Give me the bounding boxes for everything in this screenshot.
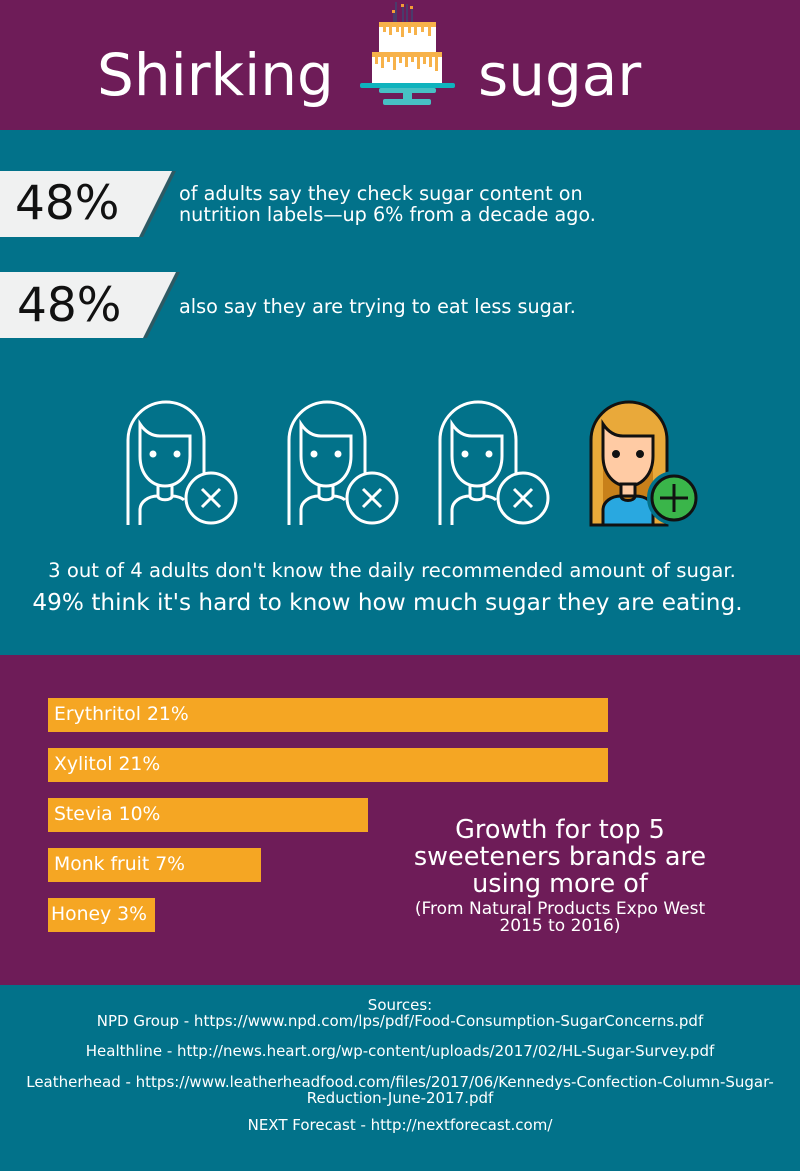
- icon: person with x: [288, 400, 398, 525]
- icons: people: [126, 400, 698, 526]
- header panel: [0, 0, 800, 130]
- sources: [0, 985, 800, 1171]
- title: [97, 41, 642, 109]
- caption: [414, 815, 706, 936]
- bar chart: Xylitol 21%: [54, 754, 160, 775]
- sources: Leatherhead - https://www.leatherheadfood.com/files/2017/06/Kennedys-Confection-Column-Sugar-: [26, 1073, 774, 1091]
- stat 1: of adults say they check sugar content on: [179, 182, 583, 205]
- sources: Sources:: [368, 996, 432, 1014]
- stat 1: 48%: [15, 176, 119, 231]
- sources: Healthline - http://news.heart.org/wp-content/uploads/2017/02/HL-Sugar-Survey.pdf: [86, 1042, 714, 1060]
- icon: person with x: [126, 400, 238, 525]
- bar chart: Stevia 10%: [54, 804, 160, 825]
- text: don't know: 3 out of 4 adults don't know the daily recommended amount of sugar.: [48, 559, 736, 582]
- sources: Reduction-June-2017.pdf: [307, 1089, 493, 1107]
- caption: Growth for top 5: [455, 815, 665, 845]
- stat 2: also say they are trying to eat less sugar.: [179, 295, 576, 318]
- stat 1: nutrition labels—up 6% from a decade ago.: [179, 203, 596, 226]
- title: sugar: [478, 41, 641, 109]
- stat 1: [0, 171, 596, 237]
- caption: using more of: [472, 869, 648, 899]
- caption: sweeteners brands are: [414, 842, 706, 872]
- panel: sweeteners: [0, 655, 800, 985]
- icon: person with x: [438, 400, 550, 525]
- stat 2: 48%: [17, 278, 121, 333]
- icon: cake: [360, 2, 455, 105]
- icon: person with plus: [590, 400, 698, 526]
- title: Shirking: [97, 41, 334, 109]
- text: hard to know: 49% think it's hard to know how much sugar they are eating.: [32, 589, 743, 616]
- caption: (From Natural Products Expo West: [415, 899, 705, 919]
- bar chart: Monk fruit 7%: [54, 854, 185, 875]
- caption: 2015 to 2016): [499, 916, 621, 936]
- bar chart: [48, 698, 608, 932]
- sources: NPD Group - https://www.npd.com/lps/pdf/Food-Consumption-SugarConcerns.pdf: [97, 1012, 703, 1030]
- sources: NEXT Forecast - http://nextforecast.com/: [248, 1116, 552, 1134]
- panel: stats: [0, 130, 800, 655]
- stat 2: [0, 272, 576, 338]
- bar chart: Erythritol 21%: [54, 704, 189, 725]
- bar chart: Honey 3%: [51, 904, 147, 925]
